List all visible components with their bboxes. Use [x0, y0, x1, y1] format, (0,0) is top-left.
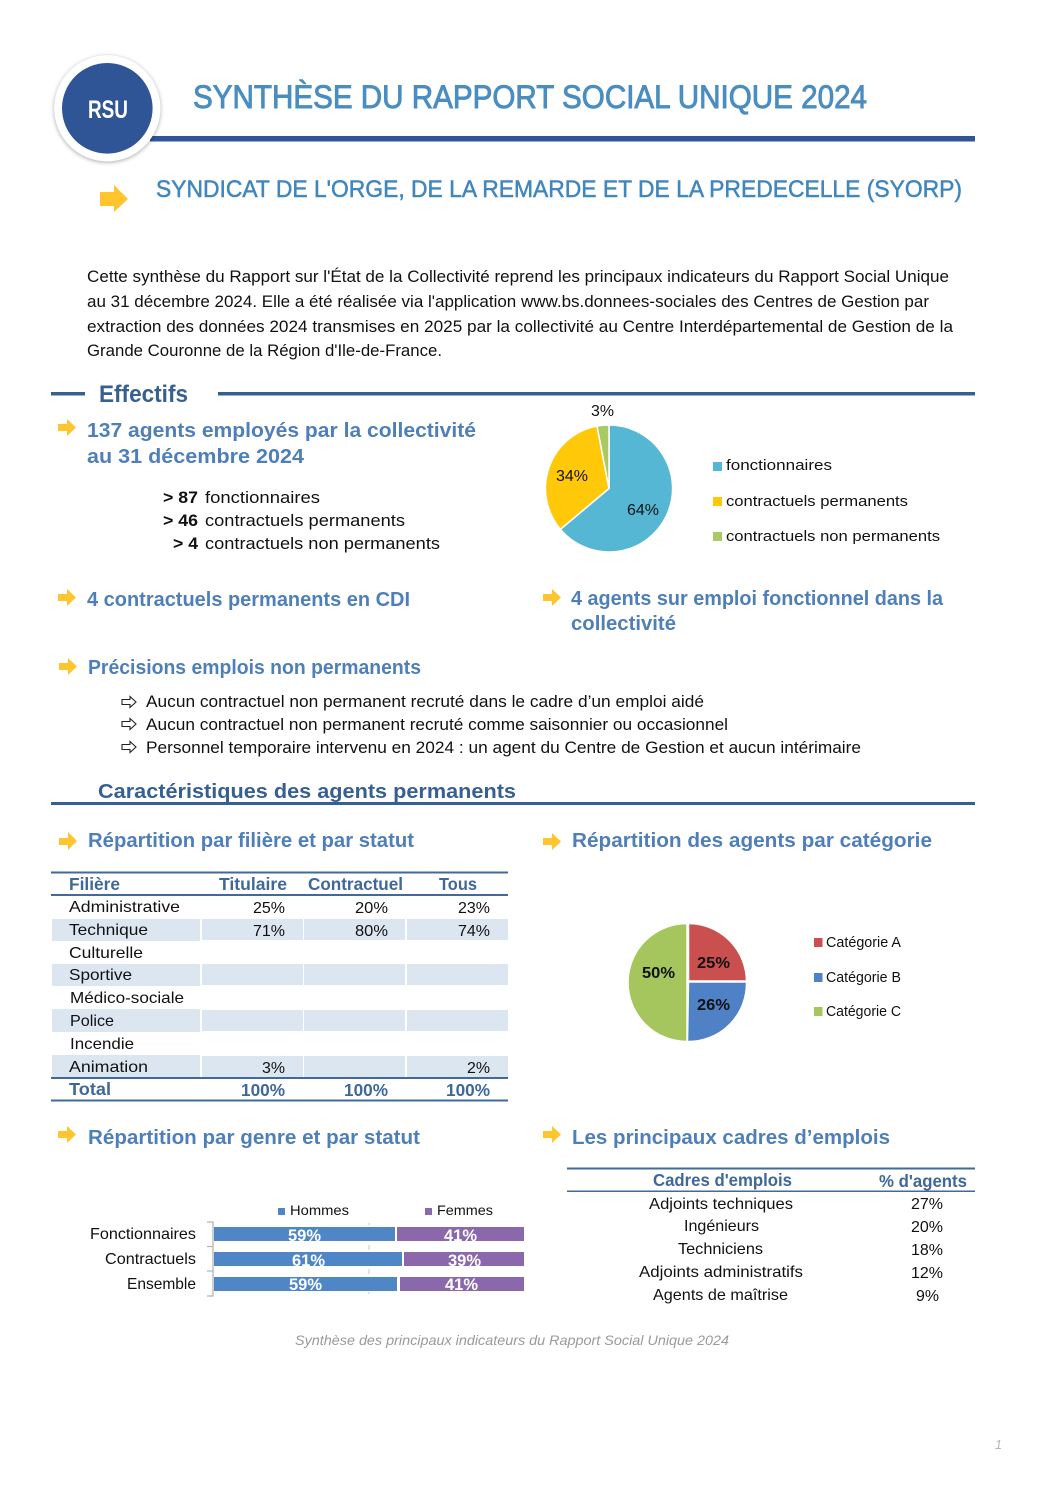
legend: statuts — [713, 457, 940, 545]
table: filière et statut: 80% — [355, 923, 388, 940]
table: filière et statut: 3% — [262, 1060, 285, 1077]
table: cadres d'emplois: 9% — [916, 1288, 939, 1305]
table: filière et statut: Sportive — [69, 967, 132, 984]
list: agents by status: > 4 — [173, 535, 199, 553]
intro paragraph — [87, 267, 954, 360]
bar chart: genre et statut: 41% — [445, 1275, 478, 1294]
table: cadres d'emplois: 27% — [911, 1196, 943, 1213]
heading: 137 agents — [87, 419, 476, 468]
section heading: Effectifs: Effectifs — [99, 381, 188, 408]
icon: arrow — [59, 658, 77, 675]
list: agents by status: contractuels permanents — [205, 512, 405, 530]
table: filière et statut: 100% — [344, 1080, 388, 1100]
section heading: caractéristiques: Caractéristiques des agents permanents — [98, 780, 516, 803]
legend: catégories: Catégorie B — [826, 969, 901, 986]
table: cadres d'emplois: Adjoints techniques — [649, 1196, 793, 1213]
list: emplois non permanents: Aucun contractuel non permanent recruté dans le cadre d’un emploi aidé — [146, 693, 704, 711]
table: filière et statut: Filière — [69, 874, 120, 894]
table: cadres d'emplois: 12% — [911, 1265, 943, 1282]
pie chart: statuts: 34% — [556, 468, 588, 485]
heading: genre: Répartition par genre et par statut — [88, 1126, 420, 1149]
list: agents by status: fonctionnaires — [205, 489, 320, 507]
table: filière et statut: Incendie — [70, 1036, 134, 1053]
icon: large yellow arrow — [100, 185, 128, 212]
intro paragraph: Grande Couronne de la Région d'Ile-de-France. — [87, 342, 442, 360]
table: filière et statut: Technique — [69, 922, 148, 939]
section heading: Effectifs — [51, 381, 975, 408]
list: agents by status — [163, 489, 440, 553]
table: cadres d'emplois: Ingénieurs — [684, 1218, 759, 1235]
table: filière et statut: Administrative — [69, 899, 180, 916]
icon: arrow — [58, 1126, 76, 1143]
legend: statuts: fonctionnaires — [726, 457, 832, 474]
heading: 137 agents: au 31 décembre 2024 — [87, 445, 305, 468]
bar chart: genre et statut: 59% — [288, 1226, 321, 1245]
legend: catégories — [814, 934, 901, 1020]
list: emplois non permanents: Aucun contractuel non permanent recruté comme saisonnier ou occasionnel — [146, 716, 728, 734]
list: agents by status: contractuels non permanents — [205, 535, 440, 553]
list: agents by status: > 87 — [163, 489, 198, 507]
legend: catégories: Catégorie C — [826, 1003, 901, 1020]
pie chart: catégories: 26% — [697, 997, 730, 1014]
bar chart: genre et statut: 39% — [448, 1251, 481, 1270]
bar chart: genre et statut: Fonctionnaires — [90, 1226, 196, 1243]
table: filière et statut: Médico-sociale — [70, 990, 184, 1007]
pie chart: catégories: 25% — [697, 955, 730, 972]
table: filière et statut: 2% — [467, 1060, 490, 1077]
list: emplois non permanents: Personnel temporaire intervenu en 2024 : un agent du Centre de Gestion et aucun intérimaire — [146, 739, 861, 757]
table: cadres d'emplois: Techniciens — [678, 1241, 763, 1258]
table: filière et statut: 74% — [458, 923, 490, 940]
legend: genre — [278, 1203, 493, 1218]
logo badge: RSU — [54, 55, 160, 161]
list: agents by status: > 46 — [163, 512, 198, 530]
table: filière et statut: Contractuel — [308, 874, 403, 894]
table: filière et statut: 25% — [253, 900, 285, 917]
heading: CDI: 4 contractuels permanents en CDI — [87, 588, 410, 611]
legend: statuts: contractuels non permanents — [726, 528, 940, 545]
pie chart: statuts: 3% — [591, 403, 614, 420]
icon: arrow — [58, 419, 76, 436]
table: cadres d'emplois: % d'agents — [879, 1171, 967, 1191]
icon: arrow — [543, 1126, 561, 1143]
table: filière et statut: Tous — [439, 874, 477, 894]
intro paragraph: extraction des données 2024 transmises en 2025 par la collectivité au Centre Interdépartemental de Gestion de la — [87, 318, 954, 336]
heading: catégorie: Répartition des agents par catégorie — [572, 829, 932, 852]
table: filière et statut: Animation — [69, 1059, 148, 1076]
logo badge: RSU: RSU — [88, 96, 128, 124]
legend: genre: Femmes — [437, 1203, 493, 1218]
icon: arrow — [543, 589, 561, 606]
heading: filière: Répartition par filière et par statut — [88, 829, 414, 852]
table: filière et statut: Total — [69, 1079, 111, 1099]
intro paragraph: au 31 décembre 2024. Elle a été réalisée via l'application www.bs.donnees-sociales des Centres de Gestion par — [87, 293, 930, 311]
section heading: caractéristiques — [51, 780, 975, 805]
bar chart: genre et statut: 59% — [289, 1275, 322, 1294]
header rule — [150, 136, 975, 142]
pie chart: statuts — [545, 403, 673, 552]
heading: emploi fonctionnel — [571, 587, 944, 635]
heading: 137 agents: 137 agents employés par la collectivité — [87, 419, 476, 442]
list: emplois non permanents — [122, 693, 861, 757]
table: filière et statut: 100% — [446, 1080, 490, 1100]
heading: cadres d'emplois: Les principaux cadres d’emplois — [572, 1126, 890, 1149]
table: cadres d'emplois: Adjoints administratifs — [639, 1264, 803, 1281]
heading: emploi fonctionnel: collectivité — [571, 612, 676, 635]
bar chart: genre et statut: 61% — [292, 1251, 325, 1270]
table: filière et statut — [51, 872, 508, 1102]
bar chart: genre et statut: Contractuels — [105, 1251, 196, 1268]
title: SYNTHÈSE DU RAPPORT SOCIAL UNIQUE 2024 — [193, 79, 867, 115]
table: filière et statut: 20% — [355, 900, 388, 917]
icon: arrow — [59, 832, 77, 850]
table: cadres d'emplois: Cadres d'emplois — [653, 1170, 792, 1190]
table: filière et statut: 23% — [458, 900, 490, 917]
table: cadres d'emplois — [567, 1168, 975, 1305]
table: filière et statut: 71% — [253, 923, 285, 940]
table: cadres d'emplois: Agents de maîtrise — [653, 1287, 788, 1304]
icon: arrow — [543, 833, 561, 850]
table: filière et statut: 100% — [241, 1080, 285, 1100]
bar chart: genre et statut: Ensemble — [127, 1276, 196, 1293]
legend: statuts: contractuels permanents — [726, 493, 908, 510]
table: filière et statut: Culturelle — [69, 945, 143, 962]
pie chart: statuts: 64% — [627, 502, 659, 519]
footer caption: Synthèse des principaux indicateurs du Rapport Social Unique 2024 — [295, 1332, 729, 1348]
legend: catégories: Catégorie A — [826, 934, 901, 951]
table: cadres d'emplois: 20% — [911, 1219, 943, 1236]
legend: genre: Hommes — [290, 1203, 349, 1218]
table: filière et statut: Police — [70, 1013, 114, 1030]
bar chart: genre et statut — [90, 1203, 524, 1296]
heading: précisions: Précisions emplois non permanents — [88, 656, 421, 679]
table: filière et statut: Titulaire — [219, 874, 287, 894]
pie chart: catégories — [628, 924, 747, 1042]
pie chart: catégories: 50% — [642, 965, 675, 982]
bar chart: genre et statut: 41% — [444, 1226, 477, 1245]
table: cadres d'emplois: 18% — [911, 1242, 943, 1259]
subtitle: SYNDICAT DE L'ORGE, DE LA REMARDE ET DE LA PREDECELLE (SYORP) — [156, 176, 962, 203]
intro paragraph: Cette synthèse du Rapport sur l'État de la Collectivité reprend les principaux indicateurs du Rapport Social Unique — [87, 267, 949, 286]
icon: arrow — [58, 589, 76, 606]
page number: 1 — [995, 1437, 1002, 1452]
heading: emploi fonctionnel: 4 agents sur emploi fonctionnel dans la — [571, 587, 944, 610]
